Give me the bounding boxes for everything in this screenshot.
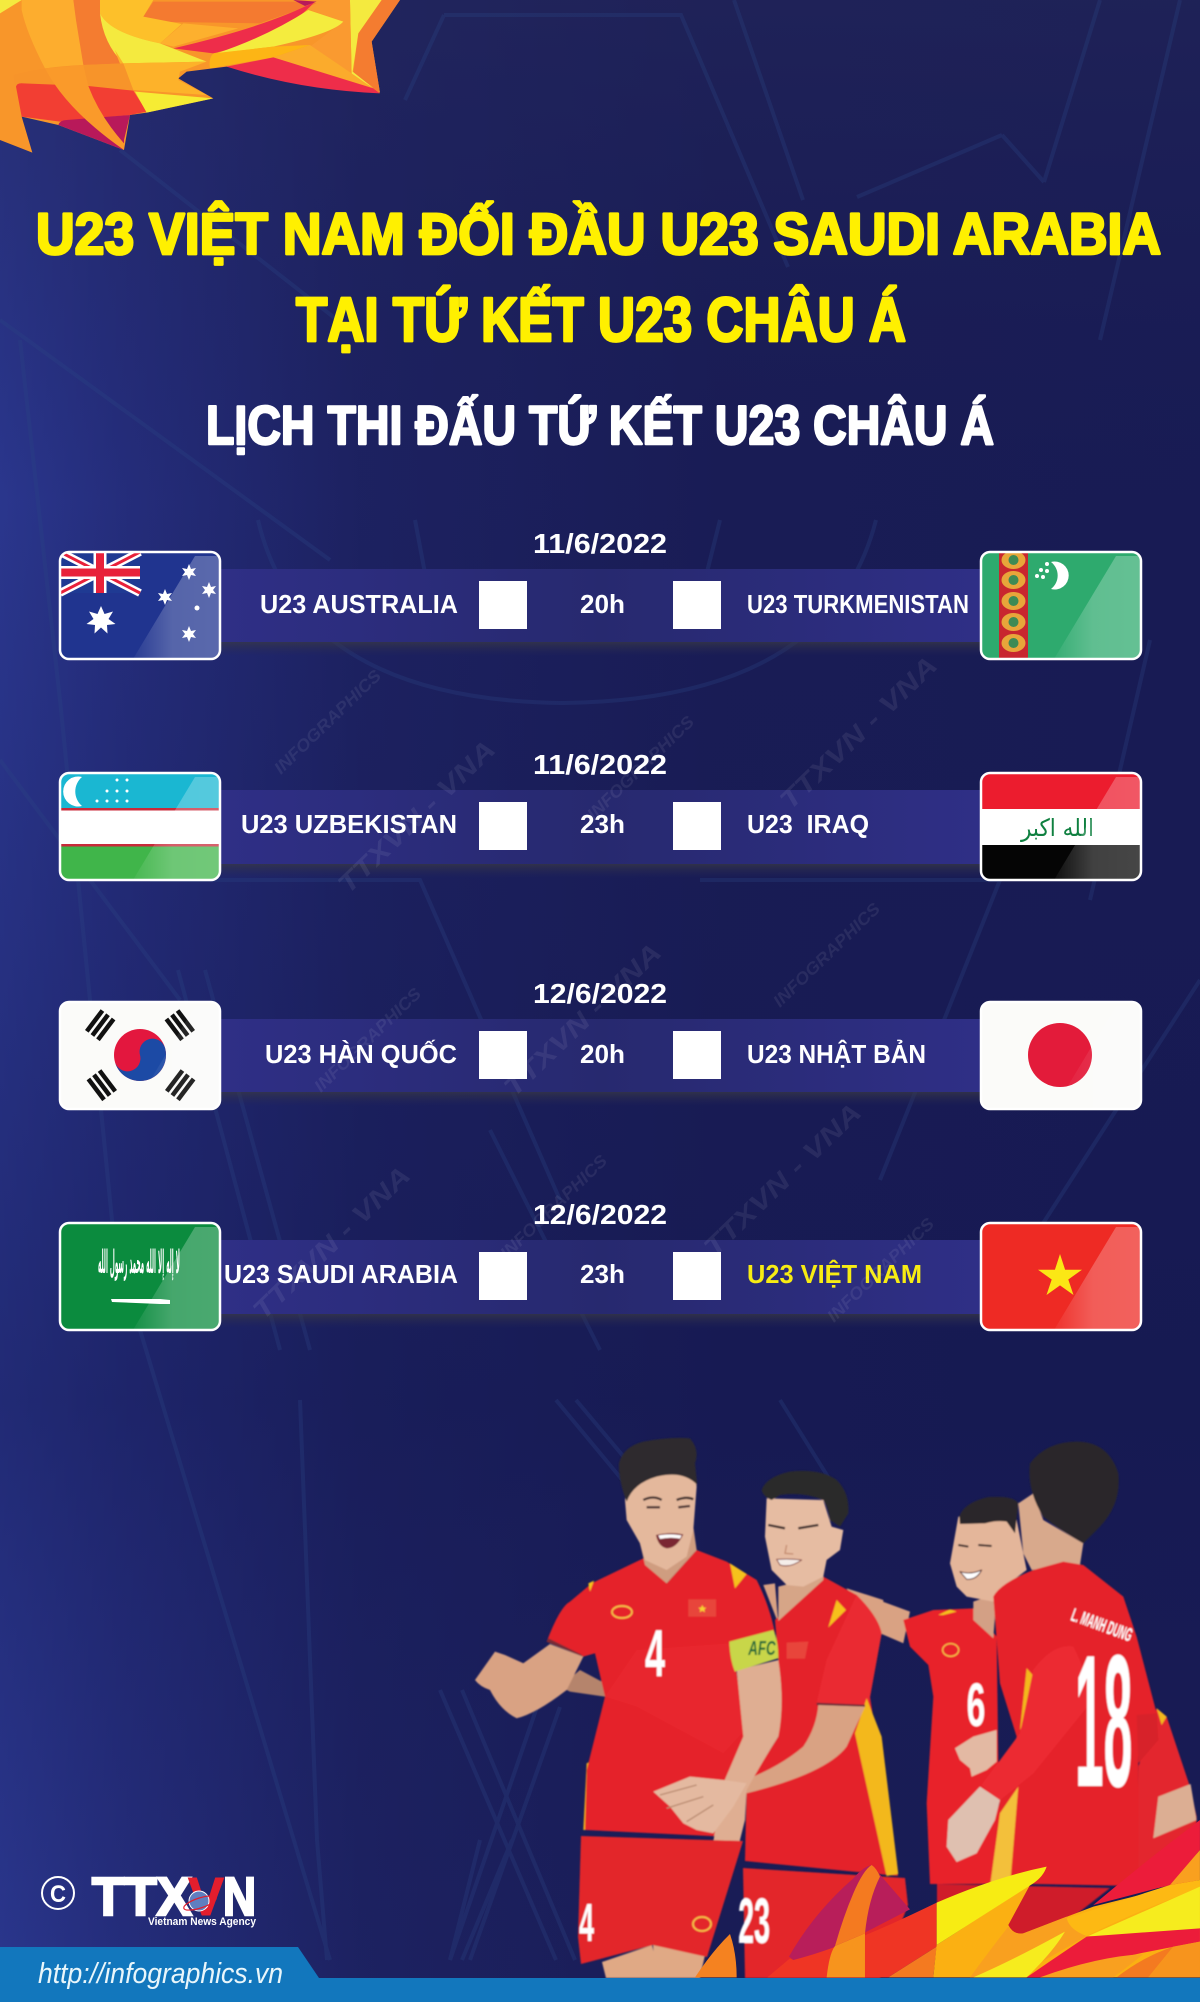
player 6: [847, 1497, 1027, 1884]
score box: [673, 1252, 721, 1300]
watermarks: INFOGRAPHICS: [583, 712, 699, 824]
score box: [479, 1031, 527, 1079]
title: [36, 202, 1161, 355]
website url: http://infographics.vn: [38, 1958, 283, 1990]
flag: Iraq: [981, 773, 1141, 880]
flag: Uzbekistan: [60, 773, 220, 880]
match row 4: [60, 1199, 1141, 1330]
players photo illustration: [475, 1438, 1197, 1978]
player 23: [745, 1471, 898, 1876]
copyright symbol: C: [50, 1881, 66, 1908]
player 6: 6: [967, 1671, 985, 1740]
team name: U23 IRAQ: [747, 809, 869, 839]
score box: [673, 1031, 721, 1079]
logo: TTXVN: Vietnam News Agency: [148, 1916, 257, 1928]
team name: U23 UZBEKISTAN: [241, 809, 457, 839]
score box: [479, 802, 527, 850]
date: 12/6/2022: [533, 978, 667, 1009]
kick-off time: 23h: [580, 1259, 625, 1289]
player 18, seen from behind: [947, 1442, 1158, 1887]
logo: TTXVN: [92, 1867, 257, 1928]
watermarks: INFOGRAPHICS: [823, 1214, 939, 1326]
match bar: [220, 790, 982, 878]
watermarks: INFOGRAPHICS: [496, 1151, 612, 1263]
score box: [479, 1252, 527, 1300]
watermarks: INFOGRAPHICS: [769, 899, 885, 1011]
corner flame decoration: [0, 0, 400, 153]
flag: Japan: [981, 1002, 1141, 1109]
score box: [479, 581, 527, 629]
player 4: 4: [645, 1618, 665, 1692]
team name: U23 AUSTRALIA: [260, 589, 458, 619]
team name: U23 SAUDI ARABIA: [224, 1259, 458, 1289]
copyright symbol: [42, 1877, 74, 1909]
logo: TTXVN: V: [188, 1867, 224, 1927]
shorts: player 23: 23: [738, 1885, 770, 1957]
match bar: [220, 1019, 982, 1106]
date: 11/6/2022: [533, 749, 667, 780]
watermarks: INFOGRAPHICS: [310, 984, 426, 1096]
team name: U23 NHẬT BẢN: [747, 1039, 926, 1069]
team name: U23 TURKMENISTAN: [747, 589, 969, 619]
logo: TTXVN: TTX: [92, 1867, 192, 1927]
kick-off time: 20h: [580, 589, 625, 619]
flag: Australia: [60, 552, 220, 659]
watermarks: INFOGRAPHICS: [270, 666, 386, 778]
player: far right, background: [1137, 1708, 1197, 1887]
match bar: [220, 1240, 982, 1328]
footer strip: [0, 1947, 1200, 2002]
player 4: [475, 1438, 782, 1857]
match row 2: [60, 749, 1141, 880]
team name: Vietnam highlighted: U23 VIỆT NAM: [747, 1259, 922, 1289]
date: 12/6/2022: [533, 1199, 667, 1230]
match row 4: لا إله إلا الله محمد رسول الله: [98, 1243, 180, 1282]
watermarks: TTXVN - VNA: [697, 1097, 867, 1262]
player 4: AFC: [748, 1637, 776, 1660]
kick-off time: 23h: [580, 809, 625, 839]
flag: South Korea: [60, 1002, 220, 1109]
score box: [673, 802, 721, 850]
watermarks: TTXVN - VNA: [773, 650, 943, 815]
flag: Vietnam: [981, 1223, 1141, 1330]
subtitle: LỊCH THI ĐẤU TỨ KẾT U23 CHÂU Á: [206, 394, 994, 456]
watermarks: TTXVN - VNA: [331, 734, 501, 899]
watermarks: TTXVN - VNA: [246, 1160, 416, 1325]
title line 2: TẠI TỨ KẾT U23 CHÂU Á: [296, 286, 906, 355]
bottom flame decoration: [695, 1820, 1200, 1977]
logo: TTXVN: N: [223, 1867, 256, 1927]
team name: U23 HÀN QUỐC: [265, 1039, 457, 1069]
flag: Iraq: الله اكبر: [1020, 814, 1094, 842]
flag: Saudi Arabia: [60, 1223, 220, 1330]
kick-off time: 20h: [580, 1039, 625, 1069]
score box: [673, 581, 721, 629]
watermarks: TTXVN - VNA: [497, 937, 667, 1102]
match bar: [220, 569, 982, 656]
match row 1: [60, 528, 1141, 659]
shorts and legs: player 4: 4: [579, 1893, 594, 1953]
date: 11/6/2022: [533, 528, 667, 559]
watermarks: [246, 650, 943, 1326]
shorts and legs: player 4: [578, 1836, 743, 1978]
match row 3: [60, 978, 1141, 1109]
shorts: player 18: [936, 1883, 1110, 1934]
shorts: player 23: [738, 1868, 908, 1978]
flag: Turkmenistan: [981, 551, 1141, 659]
